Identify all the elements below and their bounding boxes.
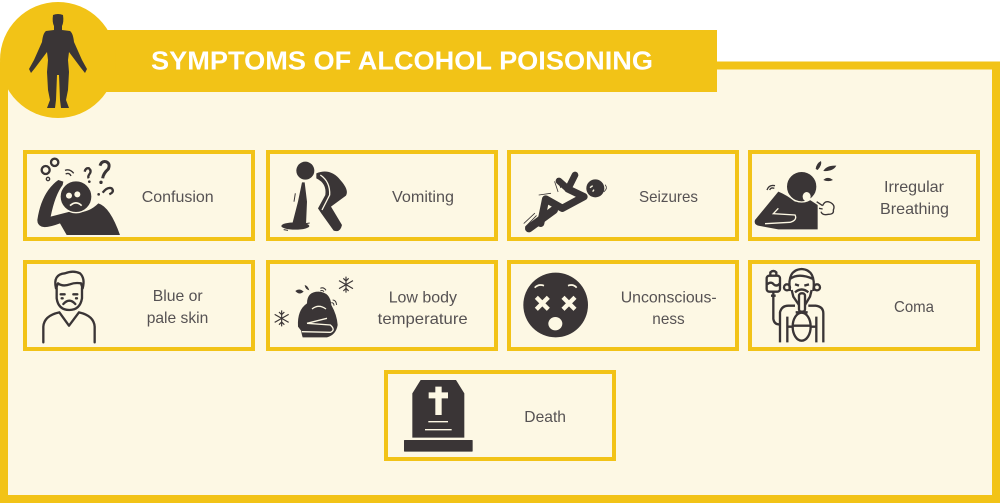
banner bar <box>90 30 717 92</box>
title: SYMPTOMS OF ALCOHOL POISONING <box>151 46 653 76</box>
card: Vomiting <box>268 152 496 239</box>
card: Seizures <box>509 152 737 239</box>
label: Blue or <box>153 288 203 305</box>
label: Seizures <box>639 189 698 206</box>
title banner <box>90 30 717 92</box>
card: Confusion <box>25 152 253 239</box>
card: Blue or pale skin <box>25 262 253 349</box>
card: Death <box>386 372 614 459</box>
label: Confusion <box>142 189 214 206</box>
label: Breathing <box>880 201 949 218</box>
icon: confused person <box>37 159 120 235</box>
icon: knocked-out face <box>523 273 588 337</box>
card border <box>268 262 496 349</box>
card border <box>25 262 253 349</box>
icon: person gasping <box>755 161 836 229</box>
card: Irregular Breathing <box>750 152 978 239</box>
card border <box>268 152 496 239</box>
label: Death <box>524 409 566 426</box>
label: ness <box>652 311 685 328</box>
card border <box>25 152 253 239</box>
card: Low body temperature <box>268 262 496 349</box>
label: Low body <box>389 290 457 307</box>
label: Coma <box>894 299 934 316</box>
card: Unconsciousness <box>509 262 737 349</box>
label: pale skin <box>147 310 208 327</box>
card border <box>509 262 737 349</box>
icon: patient with oxygen mask and IV <box>767 269 823 342</box>
label: Vomiting <box>392 189 454 206</box>
card border <box>750 152 978 239</box>
card: Coma <box>750 262 978 349</box>
icon: person vomiting <box>281 162 347 231</box>
icon: person having seizure <box>524 175 606 228</box>
label: Unconscious- <box>621 290 717 307</box>
card border <box>750 262 978 349</box>
card border <box>386 372 614 459</box>
icon: gravestone <box>404 380 473 452</box>
label: temperature <box>378 311 468 328</box>
icon: human body in circle <box>0 2 116 118</box>
card border <box>509 152 737 239</box>
icon: pale man <box>43 272 95 342</box>
label: Irregular <box>884 179 945 196</box>
icon: shivering person with snowflakes <box>275 277 353 337</box>
